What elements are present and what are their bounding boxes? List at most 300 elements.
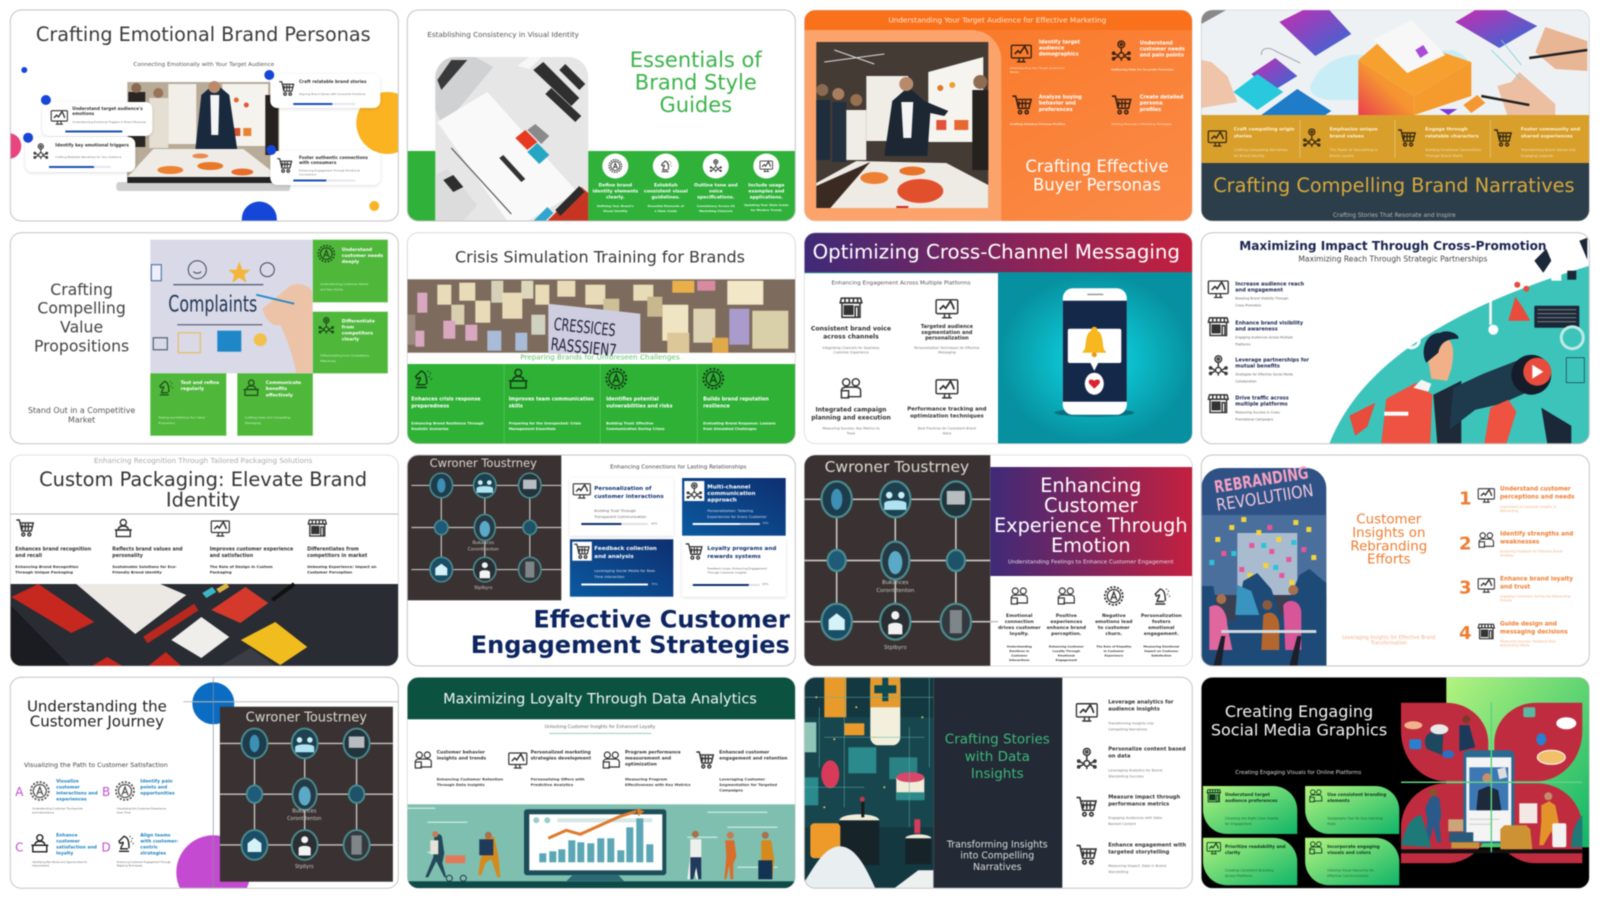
- item text: measurement and: [625, 755, 671, 761]
- item subtext: Understanding: [1007, 644, 1032, 648]
- item 1: Understand customer: [1500, 486, 1571, 492]
- green card 3: Creating Consistent Branding: [1225, 868, 1274, 872]
- title: Insights: [971, 766, 1024, 782]
- card: multi-channel: Personalization: Tailoring: [707, 509, 753, 513]
- item: campaign: [811, 379, 891, 436]
- item subtext: The Role of Empathy: [1096, 644, 1131, 648]
- item: impact: Engaging Audiences with Data-: [1108, 816, 1164, 820]
- header: [407, 677, 795, 719]
- green card 3: Across Platforms: [1225, 874, 1253, 878]
- item text: enhance brand: [1047, 625, 1086, 631]
- item C: Improvement: [32, 863, 49, 867]
- complaints image: Complaints: [168, 293, 257, 318]
- item: demographics: demographics: [1039, 52, 1079, 58]
- social media butterfly illustration: [1401, 702, 1582, 887]
- item: impact: performance metrics: [1108, 801, 1169, 807]
- item: campaign: Measuring Success: Key Metrics to: [823, 427, 879, 431]
- item subtext: Enhancing Customer Retention: [437, 776, 503, 781]
- item: profiles: [1111, 94, 1184, 126]
- green box: differentiate: Effectively: [320, 359, 336, 363]
- item: tracking: [907, 380, 987, 436]
- title: Brand Style: [635, 70, 757, 94]
- green card 1: [1203, 786, 1297, 834]
- item text: shared experiences: [1521, 134, 1573, 140]
- item subtext: Interactions: [1009, 658, 1030, 662]
- card: personalization: Personalization of: [594, 486, 652, 492]
- item: behavior: behavior and: [1039, 100, 1076, 106]
- item: content: [1078, 746, 1186, 778]
- item subtext: Through Unique Packaging: [15, 570, 73, 574]
- title: Custom Packaging: Elevate Brand: [39, 468, 367, 491]
- green box: differentiate: [313, 312, 388, 373]
- item: segmentation: segmentation and: [921, 330, 973, 336]
- title: Experience Through: [994, 514, 1188, 537]
- item A: interactions and: [56, 790, 98, 796]
- item subtext: Satisfaction: [1151, 654, 1171, 658]
- item: behavior: Crafting Detailed Persona Profiles: [1010, 122, 1066, 126]
- item: traffic: Promotional Campaigns: [1235, 418, 1274, 422]
- item: needs: Understand: [1140, 40, 1173, 46]
- item D: with customer-: [140, 838, 179, 844]
- step subtext: Visual Identity: [603, 209, 628, 213]
- item C: loyalty: [56, 850, 73, 856]
- title: with Data: [965, 749, 1030, 765]
- item A: A: [15, 785, 24, 799]
- step text: voice: [709, 188, 723, 194]
- title: Crafting Effective: [1025, 157, 1168, 176]
- step text: guidelines.: [652, 194, 680, 200]
- item subtext: Management Essentials: [509, 427, 556, 431]
- subtitle: Crafting Stories That Resonate and Inspire: [1333, 213, 1456, 219]
- card: feedback: 75%: [651, 582, 658, 586]
- item B: [102, 778, 175, 814]
- step subtext: Updating Your Style Guide: [744, 203, 789, 207]
- item: engagement: [1076, 842, 1186, 874]
- item subtext: Realistic Scenarios: [411, 427, 449, 431]
- subtitle: Narratives: [973, 862, 1022, 873]
- item subtext: Evaluating Brand Response: Lessons: [703, 422, 776, 426]
- journey image: Corontitenton: [468, 546, 499, 552]
- item B: points and: [140, 784, 167, 790]
- item B: B: [102, 785, 110, 799]
- step text: Establish: [654, 182, 678, 188]
- header band: [804, 233, 1192, 273]
- item: partnerships: Collaboration: [1235, 380, 1257, 384]
- step text: specifications.: [697, 194, 735, 200]
- item text: connection: [1005, 619, 1034, 625]
- green band: [407, 364, 795, 444]
- subtitle: Connecting Emotionally with Your Target Audience: [133, 62, 275, 68]
- item subtext: Predictive Analytics: [531, 782, 574, 787]
- item: partnerships: mutual benefits: [1235, 364, 1280, 370]
- item subtext: Campaigns: [719, 787, 744, 792]
- phone illustration: [998, 273, 1192, 444]
- item subtext: Segmentation for Targeted: [719, 782, 777, 787]
- card: personalization: 60%: [651, 522, 658, 526]
- panel: Custom Packaging: [10, 455, 398, 666]
- journey image: Corontitenton: [876, 588, 915, 594]
- title: Maximizing Impact Through Cross-Promotion: [1239, 239, 1547, 253]
- card: personalization: [570, 478, 673, 536]
- photo backing: [804, 30, 1001, 221]
- item text: to customer: [1098, 625, 1130, 631]
- subtitle: Creating Engaging Visuals for Online Platforms: [1235, 770, 1362, 776]
- item text: Improves team communication: [509, 397, 594, 403]
- item: reach: Increase audience reach: [1235, 282, 1304, 288]
- item subtext: Packaging: [210, 570, 232, 574]
- item text: Customer behavior: [437, 749, 486, 755]
- item text: Emphasize unique: [1330, 126, 1378, 132]
- title: Rebranding: [1350, 539, 1427, 554]
- title: [34, 280, 129, 356]
- subtitle: into Compelling: [960, 850, 1034, 861]
- title: Propositions: [34, 337, 129, 356]
- step text: consistent visual: [644, 188, 688, 194]
- item: visibility: [1208, 318, 1304, 347]
- item subtext: Building Emotional Connections: [1425, 148, 1481, 152]
- item text: brand values: [1330, 134, 1364, 140]
- green box: communicate: benefits: [266, 386, 287, 392]
- item: needs: customer needs: [1140, 46, 1185, 52]
- subtitle: Stand Out in a Competitive: [28, 406, 135, 415]
- item D: D: [101, 840, 111, 854]
- panel: Essentials of Brand Style Guides: [407, 10, 795, 221]
- title: Understanding the: [27, 698, 167, 716]
- green card 4: Utilizing Visual Hierarchy for: [1327, 868, 1375, 872]
- item text: churn.: [1105, 631, 1122, 637]
- item: demographics: Understanding Your Target Audience's: [1010, 66, 1065, 70]
- item text: competitors in market: [307, 553, 368, 559]
- subtitle: Transformation: [1370, 640, 1407, 646]
- callout: foster connections: Foster authentic connections: [299, 155, 368, 160]
- item subtext: Sustainable Solutions for Eco-: [112, 564, 177, 569]
- journey image: Stplbyrs: [884, 645, 907, 651]
- item subtext: Through Brand Myths: [1424, 154, 1463, 158]
- laptop photo: [116, 81, 290, 191]
- green box: test: regularly: [181, 386, 204, 392]
- item 4: Measuring Success: Feedback Post-: [1500, 640, 1557, 644]
- step subtext: Marketing Channels: [699, 209, 733, 213]
- title: Engagement Strategies: [471, 631, 790, 659]
- item 2: [1459, 532, 1573, 558]
- item subtext: Experience: [1104, 654, 1123, 658]
- item: content: Leveraging Analytics for Brand: [1108, 768, 1162, 772]
- callout: understand target audience: Understanding Emotional Triggers in Brand Personas: [72, 120, 146, 124]
- item text: Emotional: [1006, 613, 1033, 619]
- title: Creating Engaging: [1225, 702, 1373, 721]
- item 1: Rebranding: [1500, 509, 1518, 513]
- item A: [15, 778, 98, 814]
- item D: Align teams: [140, 832, 171, 838]
- card: loyalty: Feedback Loops: Enhancing Engagement: [707, 566, 768, 570]
- item: partnerships: Strategies for Effective Social Media: [1235, 373, 1293, 377]
- subtitle: Leveraging Insights for Effective Brand: [1342, 635, 1435, 641]
- item text: Improves customer experience: [210, 546, 294, 552]
- item: segmentation: Targeted audience: [921, 324, 974, 330]
- header text: Understanding Your Target Audience for Effective Marketing: [888, 16, 1106, 24]
- item: reach: and engagement: [1235, 288, 1284, 294]
- item B: Visualizing the Customer Experience: [117, 806, 166, 810]
- item: demographics: Identify target: [1039, 40, 1081, 46]
- item subtext: Impact on Customer: [1144, 649, 1179, 653]
- rebranding photo: [1201, 463, 1326, 666]
- step subtext: a Style Guide: [655, 209, 677, 213]
- panel: Crafting Compelling Value Propositions: [28, 238, 389, 436]
- item subtext: Through Data Insights: [437, 782, 485, 787]
- item: traffic: [1208, 395, 1289, 422]
- item text: emotions lead: [1095, 619, 1133, 625]
- card: multi-channel: Multi-channel: [707, 484, 751, 490]
- item: needs: Gathering Data for Accurate Personas: [1111, 68, 1174, 72]
- item subtext: Unboxing Experience: Impact on: [307, 564, 377, 569]
- green card 2: elements: [1327, 798, 1350, 804]
- data city illustration: [804, 677, 934, 888]
- subtitle: Understanding Feelings to Enhance Customer Engagement: [1008, 560, 1174, 566]
- item text: engagement and retention: [719, 755, 787, 761]
- green card 3: clarity: [1225, 850, 1241, 856]
- item: brand voice: [811, 298, 891, 355]
- item subtext: for Brand Identity: [1234, 154, 1265, 158]
- title: Buyer Personas: [1033, 176, 1161, 194]
- green card 2: Use consistent branding: [1327, 792, 1386, 798]
- title: Optimizing Cross-Channel Messaging: [813, 241, 1180, 264]
- item: analytics: Leverage analytics for: [1108, 699, 1174, 705]
- callout: foster connections: Connections: [299, 172, 317, 176]
- item subtext: Enhancing Brand Recognition: [15, 564, 79, 569]
- panel: Effective Customer Engagement Strategies: [407, 455, 795, 666]
- item 1: Importance of Customer Insights in: [1500, 505, 1556, 509]
- item subtext: Building Trust: Effective: [606, 422, 654, 426]
- item: engagement: targeted storytelling: [1108, 849, 1170, 855]
- step text: clearly.: [606, 194, 625, 200]
- item text: relatable characters: [1425, 134, 1479, 140]
- green card 4: visuals and colors: [1327, 850, 1371, 856]
- item C: satisfaction and: [56, 844, 97, 850]
- item text: Identifies potential: [606, 397, 659, 403]
- item subtext: Leveraging Customer: [719, 776, 765, 781]
- item C: C: [15, 840, 23, 854]
- green box: test: [150, 373, 226, 436]
- callout: foster connections: [266, 145, 380, 185]
- title: Enhancing: [1040, 474, 1141, 497]
- subtitle: Establishing Consistency in Visual Identity: [427, 30, 580, 39]
- card: loyalty: 85%: [762, 582, 769, 586]
- journey image: Bukances: [292, 808, 317, 814]
- journey image: Stpllyrs: [295, 864, 314, 870]
- item text: engagement.: [1144, 631, 1179, 637]
- item: campaign: planning and execution: [811, 415, 891, 422]
- panel: Crafting Compelling Brand Narratives: [1201, 10, 1589, 221]
- callout: identify triggers: [23, 133, 135, 172]
- callout: foster connections: Enhancing Engagement Through Emotional: [299, 168, 360, 172]
- green box: communicate: [237, 373, 313, 436]
- item: profiles: Create detailed: [1140, 94, 1184, 100]
- item: brand voice: Consistent brand voice: [811, 326, 891, 333]
- item 3: 3: [1459, 578, 1472, 598]
- item text: Negative: [1102, 613, 1126, 619]
- subtitle: Preparing Brands for Unforeseen Challenges: [520, 353, 680, 362]
- green box: differentiate: Differentiate: [342, 319, 375, 325]
- item text: optimization: [625, 761, 657, 767]
- steps: [602, 154, 779, 178]
- card: multi-channel: communication: [707, 491, 756, 497]
- rebranding photo: REVOLUTIION: [1215, 481, 1315, 516]
- green card 2: Posts: [1327, 822, 1336, 826]
- item: segmentation: Personalization Techniques for Effective: [914, 346, 980, 350]
- item text: Engage through: [1425, 126, 1468, 132]
- item: reach: [1208, 281, 1304, 308]
- green box: needs: Understand: [342, 247, 372, 253]
- item text: stories: [1234, 134, 1252, 140]
- item: partnerships: Leverage partnerships for: [1235, 358, 1309, 364]
- item: profiles: persona: [1140, 100, 1163, 106]
- item subtext: Customer: [1011, 654, 1028, 658]
- item: traffic: Measuring Success in Cross-: [1235, 411, 1281, 415]
- panel: Creating Engaging Social Media Graphics: [1201, 677, 1589, 888]
- item subtext: [15, 564, 377, 574]
- title: Essentials of: [630, 48, 762, 72]
- title: Crafting: [50, 280, 113, 299]
- panel: Crafting Emotional Brand Personas: [10, 25, 399, 222]
- panel: Understanding the Customer Journey: [10, 677, 398, 900]
- item subtext: Engaging Legends: [1521, 154, 1553, 158]
- journey image: Bukances: [882, 580, 909, 586]
- step text: Define brand: [599, 182, 632, 188]
- step text: identity elements: [592, 188, 638, 194]
- item: analytics: audience insights: [1108, 706, 1160, 712]
- item 4: Rebranding Efforts: [1500, 644, 1530, 648]
- item: profiles: profiles: [1140, 107, 1161, 113]
- item text: strategies development: [531, 755, 592, 761]
- item text: Personalization: [1141, 613, 1182, 619]
- item text: Enhanced customer: [719, 749, 770, 755]
- item 4: [1459, 622, 1568, 648]
- green band: [407, 151, 795, 221]
- subtitle: Transforming Insights: [946, 839, 1048, 850]
- item: brand voice: Customer Experience: [833, 351, 869, 355]
- title: Customer Journey: [30, 713, 164, 731]
- title: Emotion: [1051, 534, 1131, 557]
- item: impact: Backed Content: [1108, 822, 1137, 826]
- photo: [816, 42, 988, 208]
- icons: [416, 369, 723, 389]
- decorative circles: [10, 66, 399, 222]
- panel: Crafting Effective Buyer Personas: [804, 10, 1192, 221]
- item: partnerships: [1210, 356, 1309, 384]
- item subtext: Communication During Crises: [606, 427, 665, 431]
- title: [471, 606, 790, 659]
- item text: skills: [509, 404, 523, 410]
- subtitle: Enhancing Connections for Lasting Relationships: [610, 464, 747, 470]
- sticky-note photo: [407, 279, 795, 362]
- item text: Program performance: [625, 749, 681, 755]
- sticky-note photo: CRESSICES: [553, 315, 617, 341]
- item 2: Strategy: [1500, 554, 1514, 558]
- item: traffic: Drive traffic across: [1235, 396, 1289, 402]
- item subtext: Brand Loyalty: [1330, 154, 1354, 158]
- title: Value: [60, 318, 103, 337]
- journey image: Cwroner Toustrney: [825, 458, 969, 476]
- item subtext: [437, 776, 777, 792]
- title: Customer: [1356, 513, 1422, 528]
- item: visibility: and awareness: [1235, 327, 1278, 333]
- item subtext: Emotional: [1058, 654, 1075, 658]
- green card 1: Understand target: [1225, 792, 1270, 798]
- green box: needs: deeply: [342, 259, 359, 265]
- journey image: Cwroner Toustrney: [246, 710, 367, 725]
- item 3: [1459, 576, 1573, 602]
- item text: [437, 749, 787, 767]
- journey image: [220, 707, 393, 882]
- item: analytics: Compelling Narratives: [1108, 727, 1147, 731]
- item text: Reflects brand values and: [112, 546, 183, 552]
- subtitle: [1342, 635, 1435, 646]
- journey image: [796, 455, 998, 666]
- item: engagement: Storytelling: [1108, 870, 1128, 874]
- item subtext: Transforming Brand Values into: [1520, 148, 1576, 152]
- item 2: Identify strengths and: [1500, 532, 1573, 538]
- title: Guides: [659, 93, 732, 117]
- sticky-note photo: RASSSIEN7: [550, 335, 618, 362]
- item 1: [1459, 486, 1575, 513]
- title: [1025, 157, 1168, 194]
- subtitle: [28, 406, 135, 425]
- item D: strategies: [140, 850, 166, 856]
- callout: understand target audience: [41, 95, 152, 136]
- card: multi-channel: Experiences for Every Customer: [707, 515, 767, 519]
- item B: Identify pain: [140, 778, 173, 784]
- title: [1211, 702, 1387, 739]
- title: Customer: [1044, 494, 1138, 517]
- card: loyalty: [682, 539, 786, 597]
- item 1: 1: [1459, 488, 1472, 510]
- title: [994, 474, 1188, 557]
- icons: [1011, 587, 1170, 605]
- callout: relatable stories: Aligning Brand Values with Consumer Emotions: [299, 92, 366, 96]
- item subtext: Friendly Brand Identity: [112, 570, 162, 574]
- item subtext: Enhancing Brand Resilience Through: [411, 422, 484, 426]
- green box: test: Testing and Refining Your Value: [157, 416, 205, 420]
- card: personalization: customer interactions: [594, 494, 664, 500]
- item: traffic: multiple platforms: [1235, 402, 1288, 408]
- item B: Over Time: [117, 810, 131, 814]
- item subtext: Crafting Compelling Narratives: [1234, 148, 1288, 152]
- panel: Crafting Stories with Data Insights: [804, 677, 1192, 888]
- panel: Maximizing Loyalty Through Data Analytics: [407, 677, 795, 888]
- green box: differentiate: from: [342, 325, 354, 331]
- dividers: [1300, 120, 1490, 158]
- green box: test: Proposition: [158, 421, 175, 425]
- item: brand voice: Integrating Channels for Seamless: [823, 346, 880, 350]
- item: campaign: Integrated campaign: [816, 407, 886, 414]
- rebranding photo: REBRANDING: [1213, 463, 1310, 498]
- item text: Enhances crisis response: [411, 397, 481, 403]
- item text: personality: [112, 553, 144, 559]
- card: loyalty: rewards systems: [707, 554, 761, 560]
- item 3: and trust: [1500, 584, 1530, 590]
- card: multi-channel: approach: [707, 498, 737, 504]
- green card 1: audience preferences: [1225, 798, 1278, 804]
- item subtext: Preparing for the Unexpected: Crisis: [509, 422, 581, 426]
- icons: [16, 520, 326, 536]
- item: engagement: Measuring Impact: Data in Brand: [1108, 864, 1166, 868]
- item subtext: Measuring Emotional: [1143, 644, 1179, 648]
- item: behavior: preferences: [1039, 107, 1073, 113]
- item D: Enhancing Customer Engagement Through: [117, 860, 171, 864]
- item text: Builds brand reputation: [703, 397, 769, 403]
- green box: test: Test and refine: [181, 380, 219, 386]
- item text: emotional: [1148, 625, 1175, 631]
